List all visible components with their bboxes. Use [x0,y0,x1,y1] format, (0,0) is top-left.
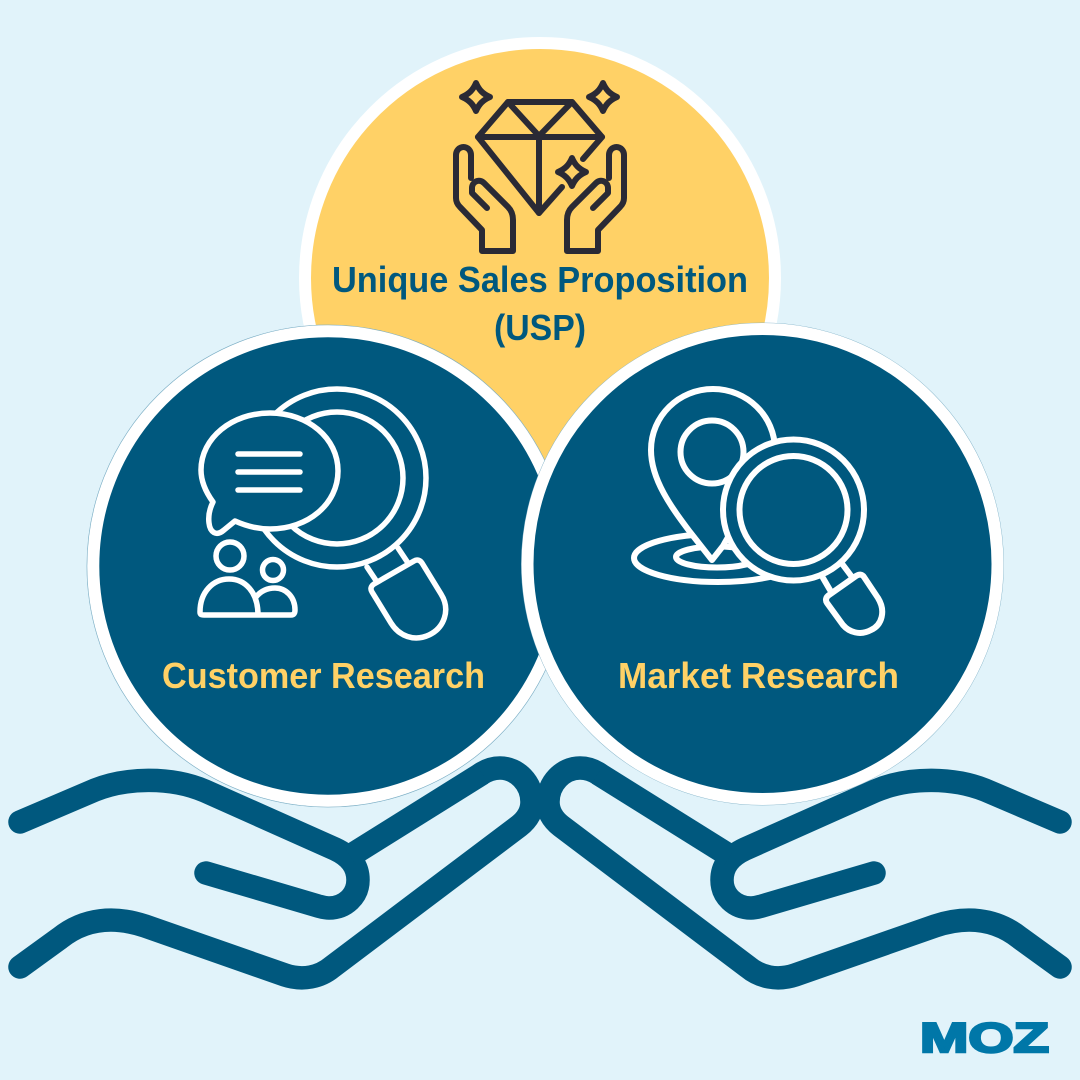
panel: unique sales proposition [305,43,775,513]
panel: market research [522,323,1004,805]
panel: customer research [87,325,569,807]
heading: unique sales proposition: Unique Sales Proposition [332,259,748,300]
icon: left hand [20,768,532,978]
logo: Moz: MOZ [920,1014,1049,1061]
label: customer research: Customer Research [162,655,485,696]
icon: diamond in hands [456,83,624,251]
heading: USP: (USP) [494,307,586,348]
icon: map pin with magnifier [634,389,882,633]
label: market research: Market Research [618,655,899,696]
icon: magnifier with speech bubble and people [200,389,446,638]
icon: right hand [548,768,1060,978]
